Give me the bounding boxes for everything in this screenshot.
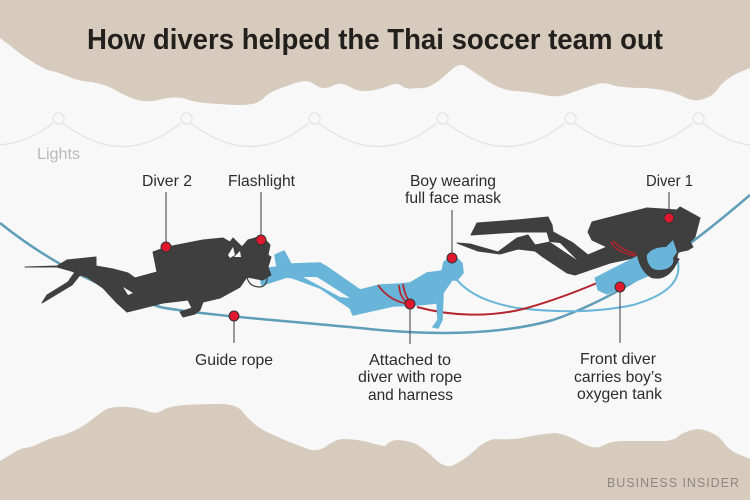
annotation: front diver carries tank: carries boy’s: [574, 369, 662, 386]
annotation: attached with rope and harness: and harness: [368, 387, 453, 404]
cave ceiling: [0, 0, 750, 105]
annotation: flashlight: Flashlight: [228, 173, 296, 190]
annotation: diver 2: Diver 2: [142, 173, 192, 190]
business insider logo: BUSINESS INSIDER: [607, 476, 739, 490]
annotation: boy wearing full face mask: full face mask: [405, 190, 502, 207]
annotation: attached with rope and harness: Attached to: [369, 352, 451, 369]
annotation: diver 1: [646, 173, 693, 223]
annotation: attached with rope and harness: [358, 299, 462, 404]
cave floor: [0, 404, 750, 500]
annotation: boy wearing full face mask: Boy wearing: [410, 173, 496, 190]
boy air hose: [457, 262, 678, 311]
rope between divers: [417, 283, 597, 315]
oxygen tank: [595, 256, 650, 294]
dark arm over tank: [639, 255, 678, 277]
guide rope: [0, 195, 750, 333]
annotation: diver 2: [142, 173, 192, 252]
annotation: front diver carries tank: Front diver: [580, 351, 657, 368]
boy silhouette: [259, 251, 463, 328]
annotation: front diver carries tank: oxygen tank: [577, 386, 663, 403]
title: How divers helped the Thai soccer team out: [87, 24, 663, 56]
annotation: boy wearing full face mask: [405, 173, 502, 263]
harness on diver: [611, 241, 636, 256]
annotation: attached with rope and harness: diver with rope: [358, 369, 462, 386]
diver 1 silhouette: [457, 207, 700, 294]
lights label: Lights: [37, 146, 80, 163]
annotation: guide rope: Guide rope: [195, 352, 273, 369]
annotation: guide rope: [195, 311, 273, 369]
annotation: front diver carries tank: [574, 282, 663, 403]
boy head: [647, 240, 677, 270]
harness: [378, 284, 412, 304]
diver 2 silhouette: [25, 236, 271, 317]
string of lights: [0, 113, 750, 146]
annotation: flashlight: [228, 173, 296, 245]
annotation: diver 1: Diver 1: [646, 173, 693, 190]
